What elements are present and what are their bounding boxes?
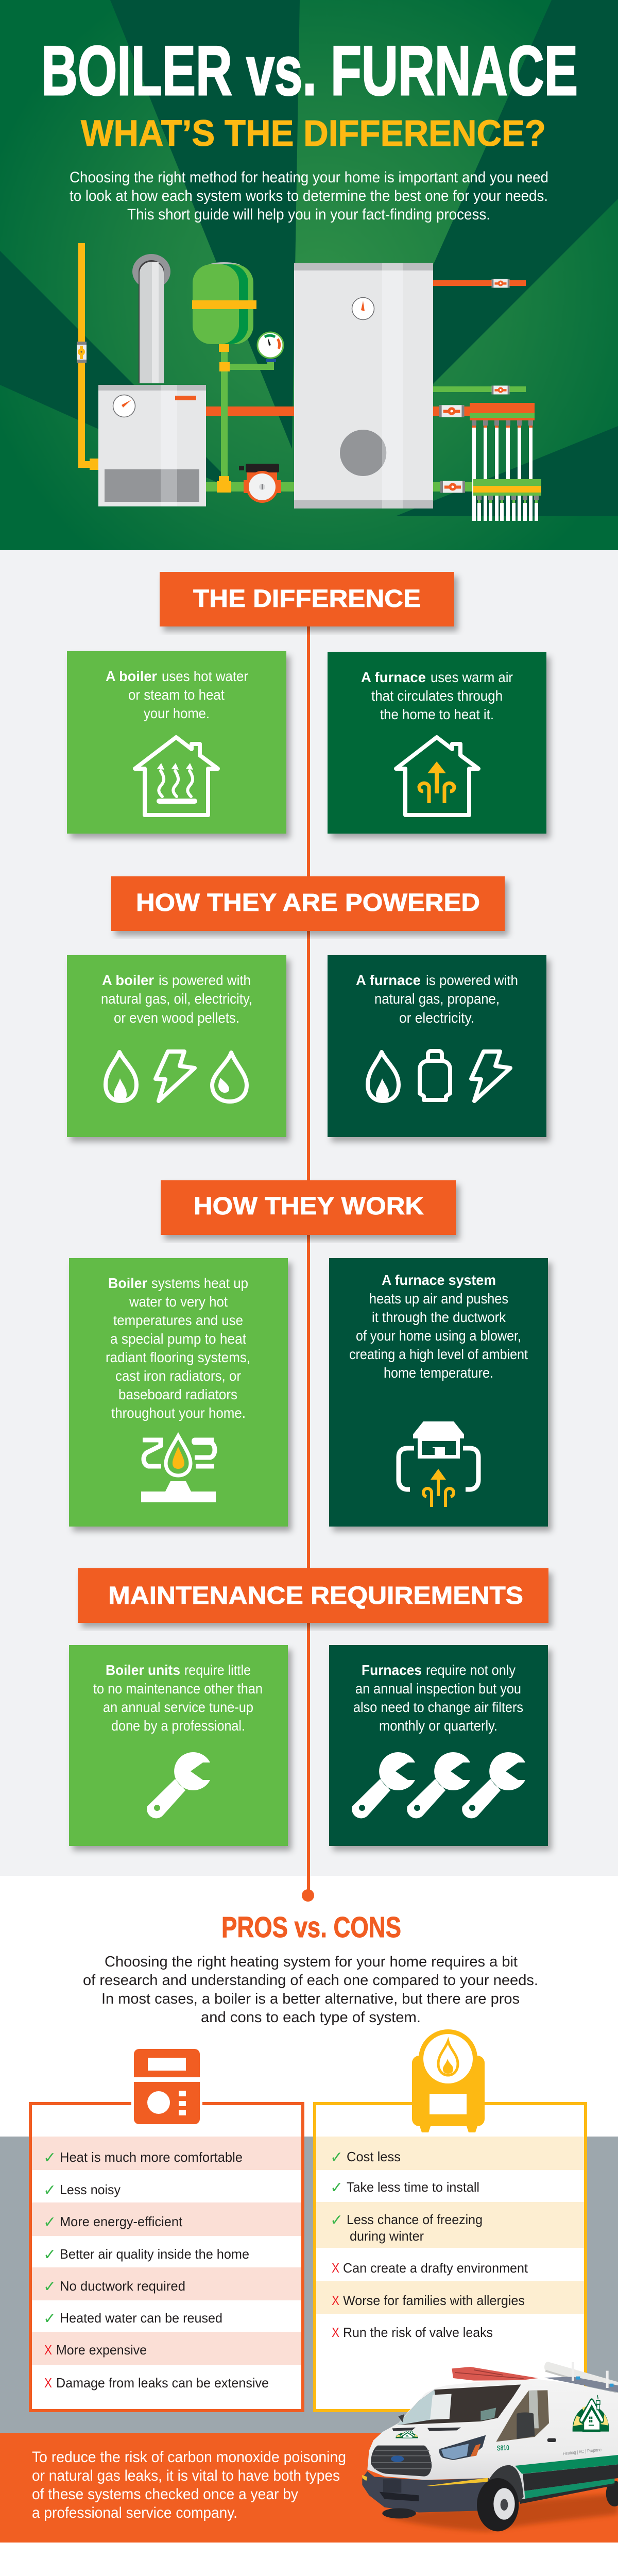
panel: furnace pros and cons: Can create a drafty environment [343,2260,528,2276]
panel: furnace maintenance: require not only [426,1662,516,1678]
gas pipe with valve [77,243,98,470]
panel: boiler maintenance: require little [184,1662,251,1678]
panel: how boiler works: temperatures and use [113,1312,243,1328]
panel: boiler maintenance: done by a professional. [111,1718,245,1734]
panel: boiler pros and cons: Heat is much more comfortable [60,2149,243,2165]
hot and return pipes between units [206,344,294,493]
icon: furnace [412,2029,485,2132]
panel: boiler difference: or steam to heat [128,687,225,703]
panel: boiler maintenance: Boiler units [106,1662,180,1678]
hood logo [396,2430,418,2438]
panel: how furnace works: creating a high level of ambient [349,1346,528,1362]
windshield [398,2384,521,2425]
panel: boiler pros and cons: ✓ [43,2213,56,2231]
icon: wrench [147,1752,210,1818]
heading: the difference [160,572,454,626]
panel: boiler difference: your home. [144,705,210,721]
cab window pillar [529,2390,539,2428]
panel: furnace power [328,955,546,1137]
heading: maintenance requirements [78,1568,548,1623]
panel: furnace pros and cons: Cost less [347,2149,401,2164]
panel: boiler power: or even wood pellets. [114,1010,239,1026]
left mirror [398,2414,404,2422]
storage tank [294,263,433,509]
timeline connector, lower part [302,1551,314,1902]
lower manifold [473,479,541,521]
grille [371,2446,432,2477]
panel: how furnace works: heats up air and pushes [369,1291,508,1307]
icon: electricity bolt [471,1052,510,1101]
chimney flue [132,254,170,383]
panel: how boiler works: systems heat up [151,1275,248,1291]
panel: boiler maintenance: an annual service tune-up [103,1699,253,1715]
panel: furnace difference [328,652,546,834]
pros and cons intro text [83,1954,538,2026]
intro text: to look at how each system works to determine the best one for your needs. [70,188,548,205]
panel: furnace difference: the home to heat it. [380,706,494,722]
panel: furnace power: is powered with [426,972,518,988]
panel: furnace maintenance: an annual inspection but you [355,1681,521,1697]
heading: pros vs cons: PROS vs. CONS [221,1911,401,1944]
subtitle: WHAT’S THE DIFFERENCE? [81,113,546,154]
illustration: boiler system [77,243,541,521]
intro text: Choosing the right method for heating your home is important and you need [70,169,548,186]
panel: furnace pros and cons: ✓ [330,2211,343,2229]
panel: furnace maintenance: Furnaces [362,1662,422,1678]
panel: boiler maintenance: to no maintenance other than [93,1681,263,1697]
pros and cons intro text: Choosing the right heating system for your home requires a bit [105,1954,518,1970]
panel: furnace pros and cons: Run the risk of valve leaks [343,2325,493,2340]
pros and cons intro text: of research and understanding of each one compared to your needs. [83,1972,538,1989]
pros and cons intro text: and cons to each type of system. [201,2009,421,2026]
panel: furnace pros and cons: X [332,2325,339,2340]
icon: electricity bolt [156,1052,195,1101]
panel: furnace pros and cons: X [332,2293,339,2308]
bumper [362,2471,489,2518]
hero panel background with rays [0,0,618,550]
panel: furnace power: A furnace [356,972,421,988]
panel: furnace maintenance: also need to change air filters [353,1699,523,1715]
panel: boiler power [67,955,286,1137]
panel: how boiler works: a special pump to heat [110,1331,246,1347]
pros and cons intro text: In most cases, a boiler is a better alternative, but there are pros [101,1991,520,2007]
icon: oil drop [212,1053,247,1101]
vehicle number: S810 [496,2443,509,2452]
rear tyre [606,2481,618,2506]
panel: furnace pros and cons: during winter [350,2228,424,2244]
panel: how boiler works: throughout your home. [111,1405,246,1421]
panel: boiler power: natural gas, oil, electricity, [101,991,252,1007]
grey content section background [0,550,618,1551]
panel: boiler pros and cons: ✓ [43,2149,56,2167]
roof pipe rack [544,2362,618,2393]
panel: boiler difference: A boiler [106,668,157,684]
door logo [573,2395,609,2432]
safety callout band: of these systems checked once a year by [32,2486,298,2503]
service van illustration [362,2362,618,2531]
panel: furnace power: natural gas, propane, [374,991,500,1007]
panel: how boiler works: baseboard radiators [118,1386,237,1402]
safety callout band: a professional service company. [32,2504,237,2521]
safety callout band [0,2433,618,2543]
panel: boiler pros and cons: Better air quality inside the home [60,2246,249,2262]
expansion tank [192,262,256,344]
icon: house with warm air [396,737,478,815]
panel: furnace pros and cons: Less chance of freezing [347,2212,483,2227]
icon: house with ducts [399,1421,478,1507]
panel: boiler pros and cons: ✓ [43,2310,56,2328]
panel: furnace pros and cons: Take less time to install [347,2179,479,2195]
panel: how furnace works: home temperature. [384,1365,493,1381]
panel: furnace difference: that circulates through [371,688,503,704]
panel: furnace pros and cons: ✓ [330,2179,343,2197]
side window [496,2390,549,2442]
icon: propane tank [420,1051,450,1100]
panel: how boiler works [69,1258,288,1527]
panel: how boiler works: cast iron radiators, or [115,1368,241,1384]
side stripes [515,2455,618,2504]
vehicle services: Heating | AC | Propane [562,2447,602,2456]
front wheel [477,2478,519,2531]
panel: boiler pros and cons: More expensive [56,2342,147,2358]
panel: boiler power: A boiler [102,972,154,988]
icon: burner flame [141,1436,216,1502]
panel: furnace pros and cons: ✓ [330,2148,343,2166]
panel: furnace pros and cons: Worse for families with allergies [343,2293,525,2308]
icon: three wrenches [352,1752,525,1818]
panel: boiler difference [67,651,286,834]
upper manifold [470,403,535,521]
panel: furnace power: or electricity. [399,1010,474,1026]
heading: how they are powered [111,876,505,931]
panel: boiler pros and cons: No ductwork required [60,2278,185,2294]
boiler unit [98,385,206,506]
panel: furnace difference: A furnace [361,669,426,685]
panel: furnace pros and cons [315,2104,586,2411]
heading: how they work: HOW THEY WORK [194,1193,424,1220]
icon: gas flame [106,1052,136,1101]
headlight [439,2435,486,2460]
panel: boiler power: is powered with [159,972,251,988]
intro text: This short guide will help you in your fact-finding process. [127,206,490,223]
heading: how they work [161,1180,456,1235]
panel: boiler pros and cons: Less noisy [60,2182,121,2197]
panel: furnace maintenance: monthly or quarterly. [379,1718,497,1734]
van body [367,2379,618,2500]
wheel arch [480,2465,524,2504]
pressure gauge [258,332,283,362]
grey content section background, lower part [0,1551,618,1876]
heading: maintenance requirements: MAINTENANCE REQUIREMENTS [108,1582,523,1609]
panel: furnace difference: uses warm air [431,669,513,685]
door handle [547,2438,556,2442]
van shadow [385,2494,618,2531]
circulation pump [239,464,281,503]
roof ladder [452,2367,538,2381]
panel: boiler pros and cons [30,2104,303,2411]
panel: furnace pros and cons: X [332,2260,339,2276]
panel: boiler difference: uses hot water [162,668,248,684]
outlet pipes and valves [433,279,526,493]
panel: boiler pros and cons: ✓ [43,2181,56,2199]
panel: how boiler works: water to very hot [129,1294,228,1310]
safety callout band: To reduce the risk of carbon monoxide poisoning [32,2449,346,2466]
panel: furnace maintenance [329,1645,548,1846]
heading: the difference: THE DIFFERENCE [193,585,421,613]
panel: boiler pros and cons: ✓ [43,2278,56,2296]
panel: boiler pros and cons: Heated water can be reused [60,2310,222,2326]
timeline connector [307,626,310,1551]
panel: how boiler works: Boiler [108,1275,147,1291]
icon: house with heat waves [135,737,218,815]
panel: boiler pros and cons: X [44,2375,52,2391]
grey band behind lists [0,2137,618,2433]
icon: gas flame [368,1052,399,1101]
hood vents [392,2428,461,2431]
heading: how they are powered: HOW THEY ARE POWERED [136,889,480,917]
panel: how furnace works [329,1258,548,1527]
panel: boiler pros and cons: More energy-efficient [60,2214,183,2229]
panel: how furnace works: of your home using a blower, [356,1328,521,1344]
panel: how furnace works: A furnace system [382,1272,496,1288]
panel: boiler maintenance [69,1645,288,1846]
safety callout band: or natural gas leaks, it is vital to have both types [32,2467,340,2484]
panel: boiler pros and cons: Damage from leaks can be extensive [56,2375,269,2391]
intro text [70,169,548,223]
panel: how furnace works: it through the ductwork [372,1309,506,1325]
panel: how boiler works: radiant flooring systems, [106,1349,250,1365]
icon: thermostat [131,2049,202,2124]
door mirror [517,2412,535,2439]
panel: boiler pros and cons: X [44,2342,52,2358]
panel: boiler pros and cons: ✓ [43,2246,56,2264]
